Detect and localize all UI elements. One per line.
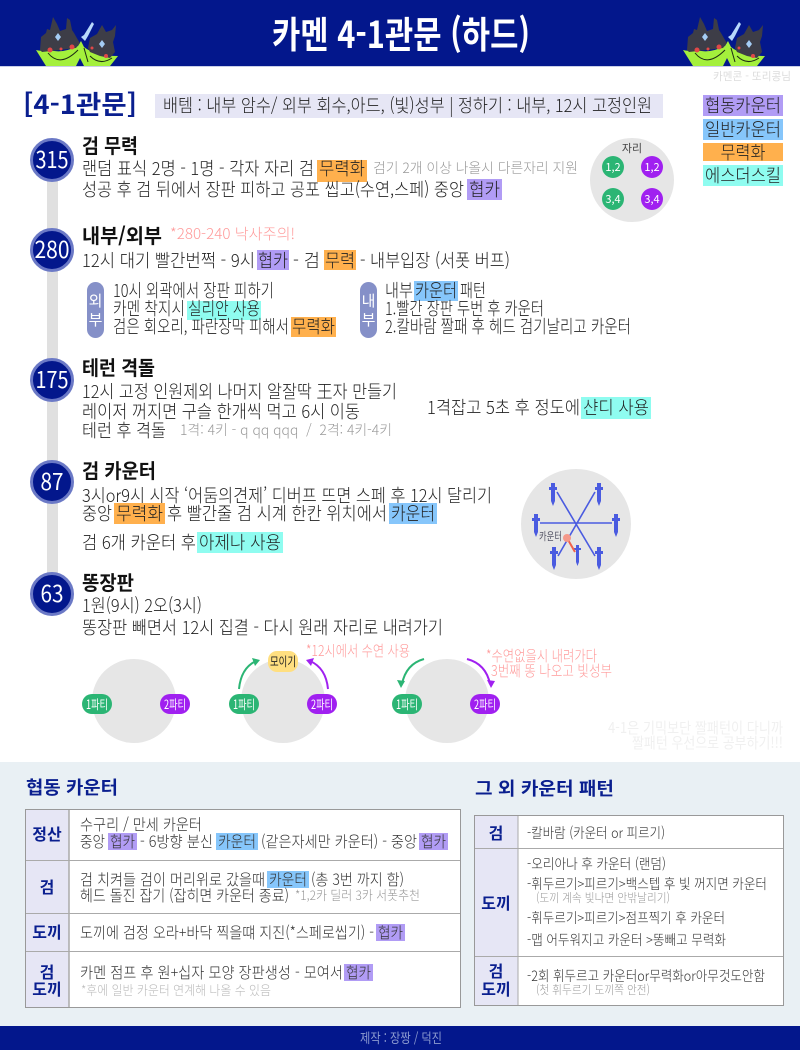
- panel: lower counters background: [0, 762, 800, 1026]
- timeline markers: 87: [40, 463, 64, 497]
- table: co-op counters: 수구리 / 만세 카운터: [80, 813, 202, 835]
- table: co-op counters: 협카: [378, 921, 403, 943]
- panel: sword counter: 검 6개 카운터 후: [82, 529, 196, 555]
- table: co-op counters: *1,2카 딜러 3카 서폿추천: [295, 885, 420, 904]
- icon: mascot right: [683, 17, 765, 66]
- panel: teleport clash: 테런 후 격돌: [82, 417, 166, 443]
- table: co-op counters: 도끼에 검정 오라+바닥 찍을떄 지진(*스페로씹기) -: [80, 921, 374, 943]
- table: other counters: -휘두르기>피르기>점프찍기 후 카운터: [527, 908, 725, 928]
- diagram: party return: 3번째 똥 나오고 빛성부: [491, 660, 612, 681]
- diagram: party gather: 모이기: [270, 651, 296, 670]
- panel: sword stagger: 검기 2개 이상 나올시 다른자리 지원: [373, 158, 578, 178]
- diagram: party start: [82, 659, 190, 743]
- footer: [0, 1026, 800, 1050]
- diagram: seat positions: 1,2: [644, 159, 660, 175]
- diagram: seat positions: 3,4: [644, 191, 660, 207]
- panel: sword counter: 카운터: [391, 500, 435, 526]
- panel: outside pattern: [87, 277, 336, 339]
- panel: inside pattern: 패턴: [460, 277, 486, 303]
- heading: 내부/외부: [82, 220, 162, 249]
- panel: inside pattern: 1.빨간 장판 두번 후 카운터: [385, 295, 544, 321]
- panel: outside pattern: 검은 회오리, 파란장막 피해서: [113, 313, 289, 339]
- panel: sword stagger: 성공 후 검 뒤에서 장판 피하고 공포 씹고(수연,스페) 중앙: [82, 176, 464, 202]
- panel: inside outside: [82, 220, 510, 273]
- legend: 무력화: [720, 139, 766, 165]
- panel: inside outside: 12시 대기 빨간번쩍 - 9시: [82, 247, 255, 273]
- legend: 협동카운터: [705, 92, 781, 118]
- panel: outside pattern: 무력화: [292, 313, 335, 339]
- diagram: seat positions: 자리: [622, 140, 642, 156]
- table: co-op counters: 중앙: [80, 830, 105, 852]
- diagram: six swords: 카운터: [539, 528, 562, 544]
- panel: inside pattern: 내부: [385, 277, 413, 303]
- panel: sword stagger: 무력화: [319, 155, 365, 181]
- table: co-op counters: 정산: [32, 821, 62, 845]
- header banner: [0, 0, 800, 67]
- panel: inside pattern: 카운터: [415, 277, 457, 303]
- legend: 에스더스킬: [705, 162, 781, 188]
- table: co-op counters: 도끼: [32, 976, 62, 1000]
- table: co-op counters: 카멘 점프 후 원+십자 모양 장판생성 - 모여서: [80, 961, 343, 983]
- panel: inside outside: - 검: [293, 247, 320, 273]
- table: other counters: [474, 816, 784, 1006]
- panel: poop pattern: 똥장판 빼면서 12시 집결 - 다시 원래 자리로 내려가기: [82, 614, 443, 640]
- panel: inside pattern: [360, 277, 631, 339]
- panel: sword counter: 3시or9시 시작 ‘어둠의견제’ 디버프 뜨면 스페 후 12시 달리기: [82, 482, 492, 508]
- table: other counters: -오리아나 후 카운터 (랜덤): [527, 854, 666, 874]
- faint note: [608, 717, 783, 753]
- diagram: seat positions: 1,2: [605, 159, 621, 175]
- panel: sword stagger: 협카: [469, 176, 500, 202]
- table: co-op counters: (총 3번 까지 함): [311, 868, 404, 890]
- panel: sword stagger: 랜덤 표식 2명 - 1명 - 각자 자리 검: [82, 155, 314, 181]
- credit text: 카멘콘 - 또리콩님: [713, 68, 791, 84]
- panel: sword stagger: [82, 130, 578, 202]
- panel: sword counter: 무력화: [116, 500, 163, 526]
- table: other counters: -맵 어두워지고 카운터 >똥빼고 무력화: [527, 930, 726, 950]
- section heading: 4-1: [4-1관문]: [23, 85, 137, 122]
- diagram: party gather: 2파티: [311, 694, 333, 713]
- table: co-op counters: 검 치켜들 검이 머리위로 갔을때: [80, 868, 265, 890]
- panel: poop pattern: [82, 567, 443, 640]
- timeline rail: [47, 170, 58, 600]
- panel: inside outside: - 내부입장 (서폿 버프): [360, 247, 510, 273]
- panel: sword counter: [82, 455, 492, 555]
- legend: 일반카운터: [705, 116, 781, 142]
- diagram: party return: *수연없을시 내려가다: [486, 645, 597, 666]
- panel: sword counter: 후 빨간줄 검 시계 한칸 위치에서: [167, 500, 387, 526]
- table: other counters: 도끼: [481, 890, 511, 914]
- table: co-op counters: - 6방향 분신: [140, 830, 213, 852]
- battle item summary bar: 배템 : 내부 암수/ 외부 회수,아드, (빛)성부 | 정하기 : 내부, 12시 고정인원: [163, 92, 652, 118]
- panel: teleport clash: 1격잡고 5초 후 정도에: [427, 394, 580, 420]
- table: other counters: -휘두르기>피르기>백스텝 후 빛 꺼지면 카운터: [527, 874, 767, 894]
- panel: poop pattern: 1원(9시) 2오(3시): [82, 592, 202, 618]
- table: co-op counters: 카운터: [269, 868, 307, 890]
- diagram: party start: 2파티: [164, 694, 186, 713]
- table: co-op counters: 협카: [346, 961, 371, 983]
- heading: 똥장판: [82, 567, 134, 596]
- timeline markers: 63: [40, 575, 64, 609]
- panel: inside outside: 협카: [258, 247, 288, 273]
- panel: teleport clash: 12시 고정 인원제외 나머지 알잘딱 王자 만들기: [82, 378, 397, 404]
- diagram: seat positions: 3,4: [605, 191, 621, 207]
- heading: 검 카운터: [82, 455, 156, 484]
- heading: other counters: 그 외 카운터 패턴: [475, 775, 614, 801]
- panel: teleport clash: 1격: 4키 - q qq qqq / 2격: 4키-4키: [180, 420, 392, 440]
- table: co-op counters: 검: [40, 959, 54, 983]
- diagram: party gather: 1파티: [233, 694, 255, 713]
- table: other counters: (첫 휘두르기 도끼쪽 안전): [536, 981, 650, 998]
- panel: teleport clash: 샨디 사용: [583, 394, 649, 420]
- table: co-op counters: 협카: [421, 830, 446, 852]
- legend: [703, 92, 783, 188]
- diagram: party return: 1파티: [396, 694, 418, 713]
- table: other counters: 검: [489, 820, 503, 844]
- diagram: party gather: *12시에서 수연 사용: [306, 640, 410, 661]
- diagram: party return: 2파티: [474, 694, 496, 713]
- panel: teleport clash: 레이저 꺼지면 구슬 한개씩 먹고 6시 이동: [82, 398, 360, 424]
- table: other counters: 도끼: [481, 976, 511, 1000]
- table: co-op counters: 협카: [110, 830, 135, 852]
- heading: 테런 격돌: [82, 352, 155, 381]
- panel: outside pattern: 10시 외곽에서 장판 피하기: [113, 277, 274, 303]
- panel: outside pattern: 외: [89, 290, 102, 311]
- panel: outside pattern: 카멘 착지시: [113, 295, 185, 321]
- panel: inside pattern: 부: [362, 309, 376, 330]
- table: co-op counters: 헤드 돌진 잡기 (잡히면 카운터 종료): [80, 884, 289, 906]
- timeline markers: 175: [36, 361, 68, 395]
- panel: outside pattern: 실리안 사용: [188, 295, 260, 321]
- timeline markers: [32, 140, 72, 614]
- timeline markers: 315: [36, 141, 68, 175]
- panel: outside pattern: 부: [89, 309, 103, 330]
- diagram: party start: 1파티: [86, 694, 108, 713]
- table: other counters: -칼바람 (카운터 or 피르기): [527, 823, 665, 843]
- panel: teleport clash: [82, 352, 651, 443]
- panel: inside pattern: 2.칼바람 짤패 후 헤드 검기날리고 카운터: [385, 313, 631, 339]
- table: other counters: (도끼 계속 빛나면 안밖날리기): [536, 889, 670, 906]
- panel: inside outside: *280-240 낙사주의!: [170, 223, 295, 244]
- heading: co-op counters: 협동 카운터: [26, 774, 118, 800]
- diagram: party return: [392, 645, 612, 743]
- table: other counters: 검: [489, 958, 503, 982]
- panel: sword counter: 아제나 사용: [199, 529, 281, 555]
- footer: 제작 : 장짱 / 덕진: [360, 1027, 442, 1047]
- table: co-op counters: *후에 일반 카운터 연계해 나올 수 있음: [81, 980, 271, 999]
- icon: mascot left: [36, 17, 118, 66]
- panel: inside outside: 무력: [325, 247, 355, 273]
- timeline markers: 280: [34, 231, 70, 265]
- table: co-op counters: 카운터: [218, 830, 256, 852]
- diagram: six swords: [521, 469, 631, 579]
- panel: inside pattern: 내: [362, 290, 375, 311]
- title: 카멘 4-1관문 (하드): [272, 5, 530, 59]
- table: co-op counters: 도끼: [32, 919, 62, 943]
- panel: sword counter: 중앙: [82, 500, 112, 526]
- table: co-op counters: 검: [40, 874, 54, 898]
- heading: 검 무력: [82, 130, 138, 159]
- diagram: seat positions: [590, 138, 674, 222]
- diagram: party gather: [229, 640, 410, 743]
- table: co-op counters: [26, 810, 460, 1008]
- table: other counters: -2회 휘두르고 카운터or무력화or아무것도안함: [527, 966, 765, 986]
- table: co-op counters: (같은자세만 카운터) - 중앙: [261, 830, 417, 852]
